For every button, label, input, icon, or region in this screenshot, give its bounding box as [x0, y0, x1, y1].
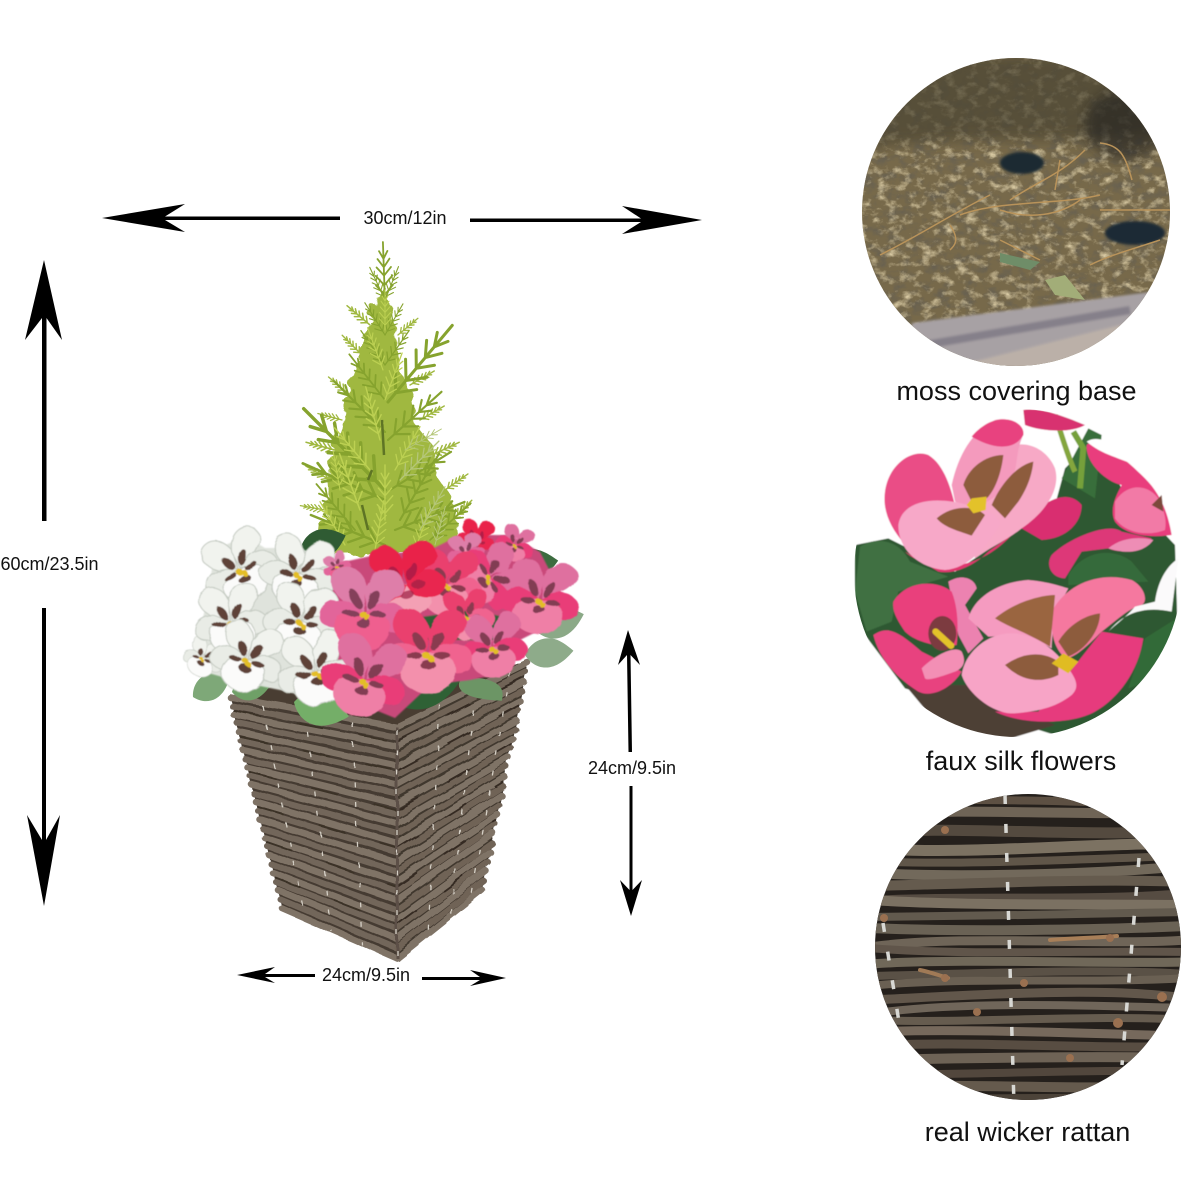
arrow: overall height: [25, 260, 62, 906]
white petal right: [1108, 558, 1178, 632]
label: pot height: 24cm/9.5in: [588, 758, 676, 778]
caption: moss: moss covering base: [896, 376, 1137, 406]
detail circle: faux silk flowers: [855, 405, 1185, 740]
label: overall width: 30cm/12in: [363, 208, 447, 228]
flower: bottom right large: [962, 577, 1145, 722]
flower backing mass: [198, 535, 565, 718]
magenta back petals: [1022, 497, 1153, 578]
arrow: overall width: [102, 204, 702, 234]
top bud: [1023, 409, 1085, 431]
label: overall height: 60cm/23.5in: [0, 554, 99, 574]
leaves: [186, 522, 588, 733]
corner and ties: [262, 672, 510, 958]
arrow: pot width: [237, 967, 506, 986]
pansies: white: [178, 520, 360, 711]
detail circle: moss: [860, 55, 1172, 373]
label: pot width: 24cm/9.5in: [322, 965, 410, 985]
background foliage: [855, 405, 1185, 740]
arrow: pot height: [618, 630, 642, 916]
left face weave: [230, 697, 397, 958]
pansies: pink: [313, 516, 585, 727]
tray edge: [910, 290, 1148, 366]
detail circle: wicker rattan: [870, 790, 1186, 1106]
wicker basket: [230, 663, 528, 958]
flower: top right: [1087, 439, 1172, 536]
caption: faux silk flowers: faux silk flowers: [926, 746, 1116, 776]
flower: top left large: [884, 419, 1056, 572]
flower: bottom left: [873, 577, 983, 694]
caption: wicker rattan: real wicker rattan: [925, 1117, 1130, 1147]
right face weave: [397, 663, 528, 958]
conifer: [292, 242, 476, 555]
